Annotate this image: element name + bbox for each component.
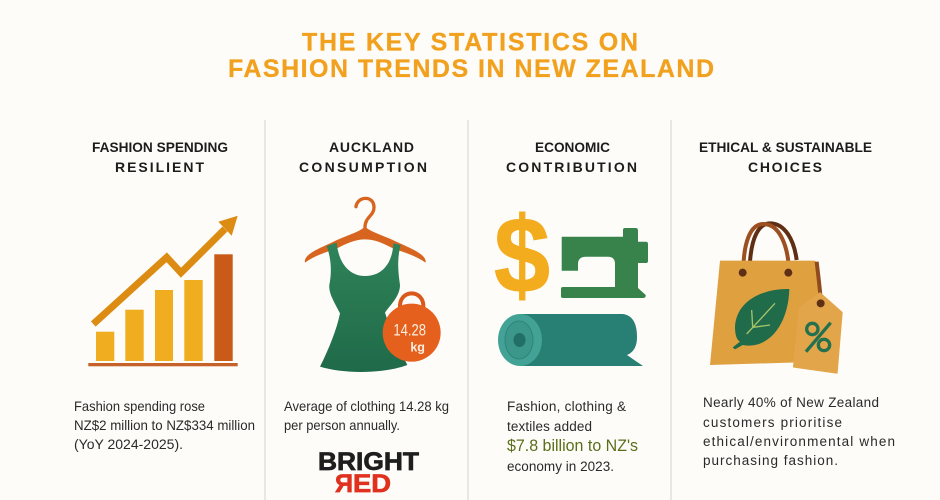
text: fashion spending rose: (YoY 2024-2025). <box>74 436 183 452</box>
heading: fashion spending resilient: RESILIENT <box>115 159 204 175</box>
logo: bright red: BRIGHT <box>318 448 419 476</box>
title: FASHION TRENDS IN NEW ZEALAND <box>228 55 714 83</box>
text: fashion spending rose <box>74 398 255 452</box>
text: fashion spending rose: Fashion spending rose <box>74 398 205 414</box>
text: ethical and sustainable: Nearly 40% of New Zealand <box>703 395 879 410</box>
icon: dress on hanger with weight: kg <box>410 340 425 354</box>
text: economic contribution: economy in 2023. <box>507 459 614 474</box>
text: ethical and sustainable <box>703 395 895 468</box>
panel: economic contribution <box>494 139 648 474</box>
text: ethical and sustainable: ethical/environmental when <box>703 434 895 449</box>
logo: bright red: R <box>335 470 353 498</box>
heading: fashion spending resilient: FASHION SPENDING <box>92 139 228 155</box>
heading: economic contribution <box>506 139 637 175</box>
title <box>228 28 714 83</box>
text: average of clothing: per person annually. <box>284 417 400 433</box>
text: average of clothing: Average of clothing 14.28 kg <box>284 398 449 414</box>
heading: economic contribution: ECONOMIC <box>535 139 610 155</box>
icon: dress on hanger with weight <box>305 198 441 372</box>
text: ethical and sustainable: customers prioritise <box>703 415 842 430</box>
logo: bright red: ED <box>353 470 391 498</box>
kettlebell weight <box>400 293 423 308</box>
hanger <box>356 198 374 227</box>
heading: auckland consumption: AUCKLAND <box>329 139 414 155</box>
panel: fashion spending <box>74 139 255 452</box>
icon: fabric roll <box>498 314 643 366</box>
logo: bright red <box>318 448 419 498</box>
icon: shopping bag with leaf and tag <box>710 223 842 373</box>
heading: fashion spending resilient <box>92 139 228 175</box>
text: economic contribution: $7.8 billion to NZ's <box>507 436 638 455</box>
heading: auckland consumption: CONSUMPTION <box>299 159 427 175</box>
heading: ethical and sustainable choices: ETHICAL & SUSTAINABLE <box>699 139 872 155</box>
panel: auckland consumption <box>284 139 449 498</box>
heading: auckland consumption <box>299 139 427 175</box>
text: economic contribution <box>507 399 638 474</box>
icon: rising bar chart with arrow <box>88 216 238 366</box>
text: economic contribution: Fashion, clothing & <box>507 399 626 414</box>
text: economic contribution: textiles added <box>507 419 592 434</box>
icon: dollar sign: $ <box>494 194 550 315</box>
text: average of clothing <box>284 398 449 433</box>
text: ethical and sustainable: purchasing fashion. <box>703 453 838 468</box>
heading: ethical and sustainable choices <box>699 139 872 175</box>
icon: sewing machine <box>561 228 648 298</box>
heading: economic contribution: CONTRIBUTION <box>506 159 637 175</box>
heading: ethical and sustainable choices: CHOICES <box>748 159 822 175</box>
text: fashion spending rose: NZ$2 million to NZ$334 million <box>74 417 255 433</box>
dress <box>320 243 407 372</box>
title: THE KEY STATISTICS ON <box>302 28 638 56</box>
panel: ethical and sustainable choices <box>699 139 895 468</box>
icon: dress on hanger with weight: 14.28 <box>393 321 426 340</box>
